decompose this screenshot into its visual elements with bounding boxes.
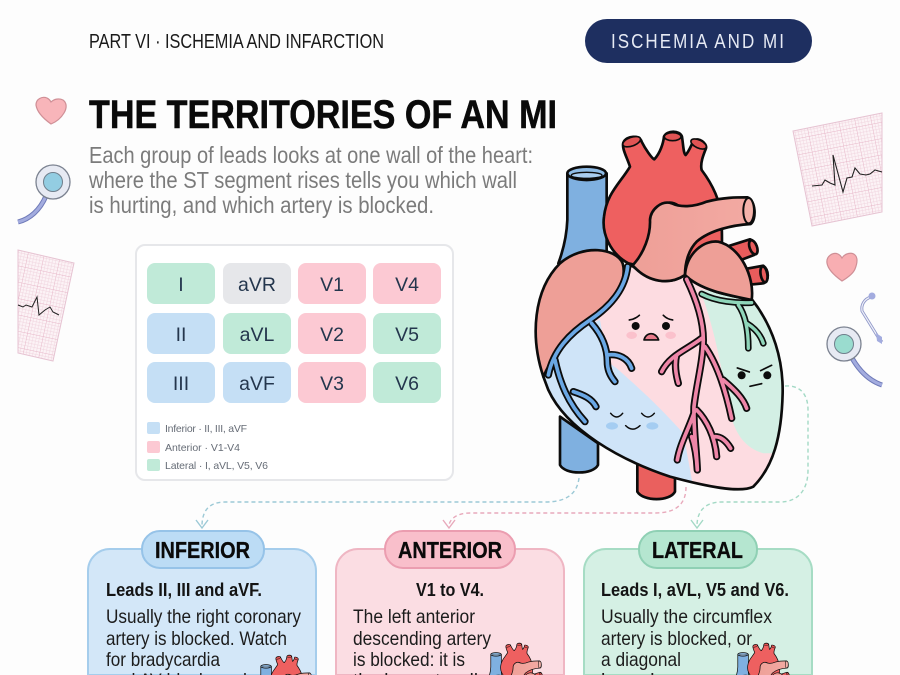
right atrium <box>536 250 624 377</box>
icon: ECG strip right <box>793 113 882 226</box>
icon: ECG strip left <box>18 250 74 361</box>
badge: lateral <box>639 531 757 568</box>
connector: heart to anterior card <box>443 487 686 528</box>
face: inferior sleepy <box>606 413 658 430</box>
text: inferior leads: Leads II, III and aVF. <box>106 579 262 600</box>
subtitle text: Each group of leads looks at one wall of the heart: <box>89 142 533 168</box>
lead grid cells: V1 <box>320 274 344 296</box>
lead grid cells: V4 <box>395 274 419 296</box>
text: anterior description: The left anterior <box>353 606 475 628</box>
circumflex artery <box>702 294 763 348</box>
white gap between vessels <box>663 202 682 208</box>
text: inferior description: artery is blocked. Watch <box>106 628 287 650</box>
icon: mini heart inferior <box>260 654 312 675</box>
icon: mini heart anterior <box>489 642 542 675</box>
badge: inferior: INFERIOR <box>155 537 250 563</box>
subtitle text: where the ST segment rises tells you which wall <box>88 167 517 193</box>
lead grid cells: III <box>173 373 189 395</box>
badge: inferior <box>142 531 264 568</box>
panel: ECG lead grid <box>136 245 453 480</box>
pulmonary trunk <box>633 197 755 281</box>
panel: lateral <box>584 531 812 675</box>
text: lateral leads: Leads I, aVL, V5 and V6. <box>601 579 789 600</box>
text: inferior description: Usually the right coronary <box>106 606 301 628</box>
text: anterior leads: V1 to V4. <box>416 579 484 600</box>
breadcrumb heading: PART VI · ISCHEMIA AND INFARCTION <box>89 31 384 53</box>
lead grid cells: II <box>176 324 186 346</box>
text: inferior description: for bradycardia <box>106 649 220 671</box>
lead grid cells: V3 <box>320 373 344 395</box>
text: lateral description: Usually the circumflex <box>601 606 772 628</box>
pulmonary trunk opening <box>743 198 754 223</box>
legend: Lateral · I, aVL, V5, V6 <box>165 460 268 472</box>
aortic arch <box>604 132 722 277</box>
right coronary artery <box>548 267 632 422</box>
connector: heart to inferior card <box>196 478 579 528</box>
face: anterior worried <box>626 315 676 340</box>
legend: Inferior · II, III, aVF <box>165 423 247 435</box>
icon: mini heart lateral <box>736 642 790 675</box>
lead grid cells: V6 <box>395 373 419 395</box>
face: lateral grumpy <box>737 365 772 386</box>
lead grid cells <box>147 263 441 403</box>
section badge: ISCHEMIA AND MI <box>611 31 786 53</box>
badge: anterior: ANTERIOR <box>398 537 502 563</box>
inferior vena cava <box>560 417 598 472</box>
text: inferior description <box>106 606 301 675</box>
superior vena cava <box>558 167 607 263</box>
heart illustration <box>533 132 793 500</box>
descending aorta <box>637 463 675 499</box>
badge: anterior <box>385 531 515 568</box>
section badge <box>585 19 812 63</box>
badge: lateral: LATERAL <box>652 537 743 563</box>
lead grid cells: aVR <box>238 274 276 296</box>
panel: inferior <box>88 531 322 675</box>
title: THE TERRITORIES OF AN MI <box>89 93 557 137</box>
legend: Anterior · V1-V4 <box>165 442 240 454</box>
left atrium <box>685 242 752 300</box>
panel: anterior <box>336 531 564 675</box>
text: lateral description: a diagonal <box>601 649 681 671</box>
icon: small heart right <box>827 253 857 281</box>
text: anterior description <box>353 606 491 675</box>
text: anterior description: is blocked: it is <box>353 649 465 671</box>
subtitle text <box>88 142 533 218</box>
icon: stethoscope left <box>18 165 70 222</box>
lead grid cells: V5 <box>395 324 419 346</box>
lead grid cells: aVL <box>240 324 274 346</box>
text: lateral description <box>601 606 772 675</box>
pulmonary veins <box>727 239 769 285</box>
left anterior descending artery <box>662 279 747 470</box>
lead grid cells: V2 <box>320 324 344 346</box>
lead grid cells: I <box>178 274 184 296</box>
ventricle territories <box>544 268 782 488</box>
connector: heart to lateral card <box>691 386 808 528</box>
subtitle text: is hurting, and which artery is blocked. <box>89 192 434 218</box>
legend <box>147 422 268 472</box>
text: lateral description: artery is blocked, or <box>601 628 752 650</box>
lead grid cells: aVF <box>239 373 275 395</box>
icon: small heart left <box>36 97 66 124</box>
icon: stethoscope right <box>827 292 882 385</box>
text: anterior description: descending artery <box>353 628 491 650</box>
ventricle outline <box>543 265 783 489</box>
